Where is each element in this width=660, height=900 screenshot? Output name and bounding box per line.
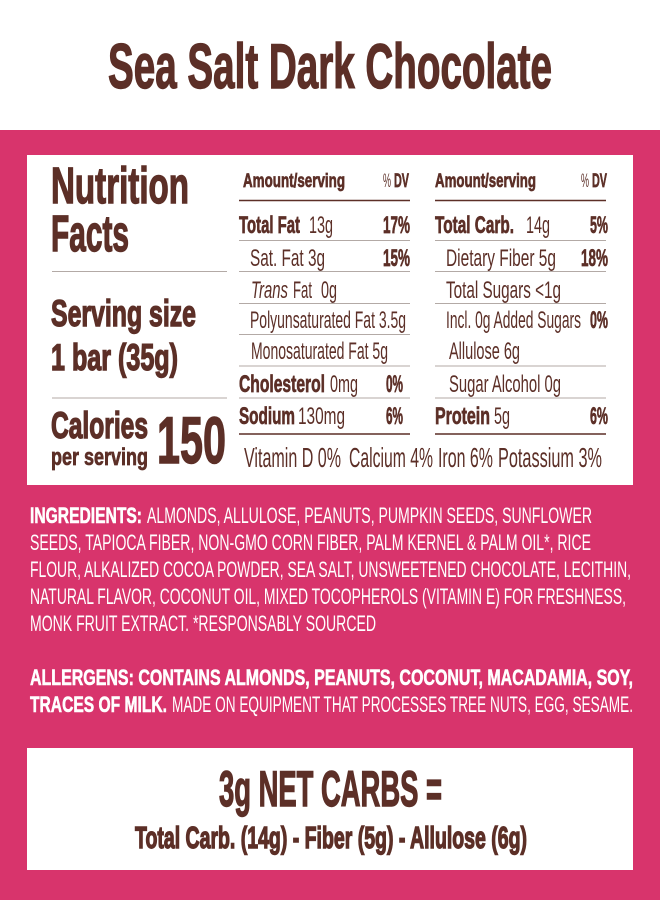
vitamins and minerals row: Vitamin D 0% <box>244 442 341 473</box>
table: fats column: 17% <box>383 212 410 239</box>
table: carbs column: 18% <box>581 245 608 272</box>
table: fats column: Total Fat <box>239 212 300 239</box>
table: fats column: Trans <box>251 277 288 304</box>
heading: nutrition facts: Facts <box>51 205 129 262</box>
table: carbs column <box>435 171 608 434</box>
serving size: 1 bar (35g) <box>51 337 178 378</box>
table: fats column: DV <box>394 171 409 192</box>
serving size <box>51 293 196 378</box>
table: carbs column: Total Sugars <1g <box>446 277 561 304</box>
table: carbs column: 5g <box>494 403 510 430</box>
text block: allergens: TRACES OF MILK. <box>30 692 167 717</box>
table: fats column: Sodium <box>239 403 295 430</box>
vitamins and minerals row <box>244 442 602 473</box>
panel: nutrition facts <box>27 155 633 485</box>
text block: allergens <box>30 665 633 717</box>
vitamins and minerals row: Iron 6% <box>438 442 493 473</box>
calories: 150 <box>157 403 226 477</box>
table: fats column: 130mg <box>298 403 345 430</box>
table: fats column: Polyunsaturated Fat 3.5g <box>250 307 406 334</box>
table: carbs column: 14g <box>526 212 550 239</box>
table: carbs column: % <box>581 171 589 192</box>
heading: nutrition facts <box>51 157 189 262</box>
table: fats column: 0% <box>386 371 403 398</box>
table: carbs column: Sugar Alcohol 0g <box>449 371 561 398</box>
table: carbs column: Dietary Fiber 5g <box>446 245 556 272</box>
table: fats column: 0g <box>321 277 337 304</box>
calories <box>51 403 226 477</box>
net carbs heading: 3g NET CARBS = <box>219 761 442 817</box>
vitamins and minerals row: Calcium 4% <box>349 442 433 473</box>
table: fats column: Sat. Fat 3g <box>250 245 325 272</box>
calories: per serving <box>51 444 148 471</box>
text block: ingredients: MONK FRUIT EXTRACT. *RESPONSABLY SOURCED <box>30 611 376 636</box>
heading: nutrition facts: Nutrition <box>51 157 189 214</box>
text block: ingredients: INGREDIENTS: <box>30 503 142 528</box>
panel: net carbs <box>27 748 633 870</box>
table: fats column: Fat <box>293 277 312 304</box>
table: carbs column: Total Carb. <box>435 212 514 239</box>
table: fats column <box>239 171 410 434</box>
serving size: Serving size <box>51 293 196 334</box>
table: carbs column: Allulose 6g <box>449 338 520 365</box>
table: fats column: Monosaturated Fat 5g <box>251 338 388 365</box>
text block: ingredients <box>30 503 631 636</box>
table: carbs column: 0% <box>590 307 608 334</box>
table: fats column: % <box>383 171 391 192</box>
calories: Calories <box>51 405 148 446</box>
table: fats column: 15% <box>383 245 410 272</box>
table: fats column: 13g <box>309 212 333 239</box>
table: carbs column: Amount/serving <box>435 171 536 192</box>
table: carbs column: DV <box>592 171 607 192</box>
table: carbs column: 5% <box>590 212 608 239</box>
table: fats column: 6% <box>386 403 403 430</box>
table: fats column: Amount/serving <box>243 171 345 192</box>
table: fats column: 0mg <box>330 371 358 398</box>
table: carbs column: Protein <box>435 403 490 430</box>
table: fats column: Cholesterol <box>239 371 325 398</box>
table: carbs column: 6% <box>590 403 608 430</box>
